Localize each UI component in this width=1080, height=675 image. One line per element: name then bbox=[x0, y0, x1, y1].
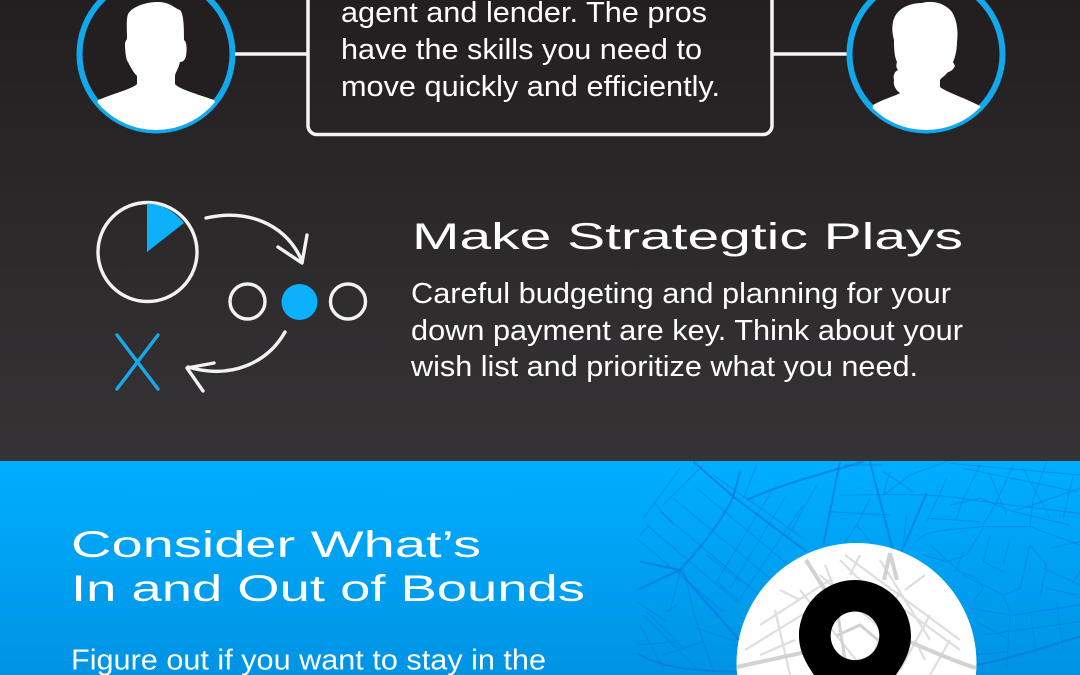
icon: male agent portrait bbox=[80, 0, 232, 131]
text: team advice bbox=[341, 0, 720, 103]
text: team advice: move quickly and efficiently. bbox=[341, 71, 720, 103]
icon: black pin bbox=[799, 580, 911, 675]
arrow: top curved bbox=[206, 215, 307, 263]
text: strategy body bbox=[410, 278, 963, 383]
icon: pie clock bbox=[98, 202, 197, 302]
icon: open circle left bbox=[230, 284, 265, 319]
panel: team text box bbox=[308, 0, 772, 134]
text: strategy body: wish list and prioritize what you need. bbox=[410, 351, 918, 383]
connector: right bbox=[772, 52, 847, 56]
heading: consider what's in and out of bounds bbox=[71, 524, 585, 609]
icon: blue X bbox=[117, 335, 158, 389]
icon: white map disc bbox=[737, 543, 976, 675]
heading: consider what's in and out of bounds: In and Out of Bounds bbox=[71, 568, 585, 609]
arrow: bottom curved bbox=[187, 332, 285, 391]
connector: left bbox=[235, 52, 308, 56]
icon: filled blue circle bbox=[282, 284, 318, 320]
icon: strategy play diagram bbox=[98, 202, 366, 391]
chart: street map background bbox=[637, 462, 1080, 672]
text: strategy body: Careful budgeting and planning for your bbox=[411, 278, 951, 310]
icon: map location pin bbox=[737, 543, 976, 675]
heading: make strategic plays: Make Strategtic Plays bbox=[412, 216, 963, 257]
text: strategy body: down payment are key. Think about your bbox=[411, 315, 963, 347]
panel: dark background bbox=[0, 0, 1080, 461]
heading: consider what's in and out of bounds: Consider What’s bbox=[71, 524, 481, 565]
icon: female lender portrait bbox=[850, 0, 1002, 131]
text: team advice: have the skills you need to bbox=[341, 34, 702, 66]
panel: blue section bbox=[0, 461, 1080, 675]
icon: open circle right bbox=[330, 284, 366, 319]
